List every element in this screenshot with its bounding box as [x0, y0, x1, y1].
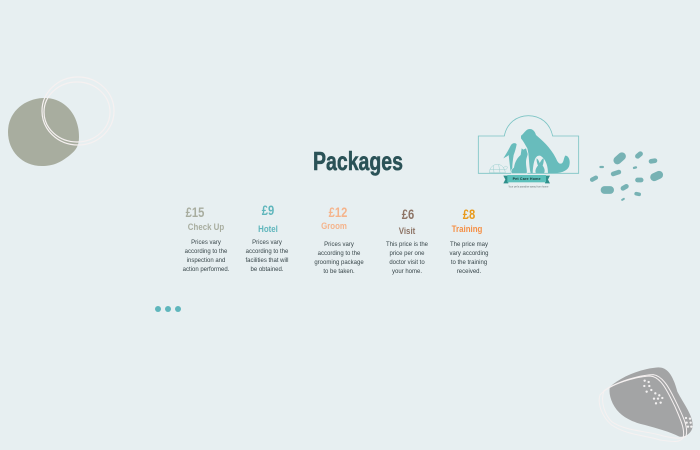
description — [182, 240, 229, 273]
logo tagline: Your pet's paradise away from home — [508, 186, 549, 189]
splatter: teal dashes — [589, 150, 664, 201]
blob: olive circle top left — [8, 98, 79, 166]
logo: pet care home — [478, 116, 579, 189]
cat silhouette — [511, 148, 528, 173]
parrot silhouette — [503, 143, 517, 173]
description — [386, 242, 428, 275]
rings: white outlines top left — [42, 77, 114, 145]
price: £12 — [329, 204, 347, 220]
price: £8 — [463, 206, 475, 222]
blob: grey pebble bottom right — [599, 367, 693, 442]
logo name: Pet Care Home — [513, 177, 541, 181]
description: Prices vary — [191, 240, 221, 246]
price: £9 — [262, 202, 274, 218]
description: according to the — [185, 249, 227, 255]
dog silhouette — [521, 129, 570, 173]
description: action performed. — [183, 267, 229, 273]
logo ribbon — [503, 176, 508, 183]
description: grooming package — [314, 260, 364, 266]
description: received. — [457, 269, 481, 275]
description — [314, 242, 364, 275]
description — [245, 240, 289, 273]
name: Groom — [321, 221, 347, 232]
description: according to the — [246, 249, 288, 255]
dots — [643, 379, 692, 428]
description: vary according — [449, 251, 489, 257]
description: according to the — [318, 251, 360, 257]
package: hotel — [245, 202, 289, 273]
description: to the training — [451, 260, 487, 266]
description: inspection and — [187, 258, 225, 264]
description: Prices vary — [324, 242, 354, 248]
description: to be taken. — [323, 269, 355, 275]
description: your home. — [392, 269, 422, 275]
description: doctor visit to — [389, 260, 425, 266]
description — [449, 242, 489, 275]
rabbit silhouette — [535, 158, 545, 173]
package: visit — [386, 206, 428, 275]
three dots — [155, 306, 181, 312]
name: Check Up — [187, 222, 224, 233]
name: Visit — [399, 226, 415, 237]
name: Hotel — [258, 224, 278, 235]
price: £6 — [402, 206, 414, 222]
package: training — [449, 206, 489, 275]
price: £15 — [186, 204, 204, 220]
logo frame — [478, 116, 579, 173]
name: Training — [451, 224, 482, 235]
description: Prices vary — [252, 240, 282, 246]
white outlines — [599, 375, 687, 442]
package: check up — [182, 204, 229, 273]
description: The price may — [450, 242, 488, 248]
description: price per one — [389, 251, 425, 257]
package: groom — [314, 204, 364, 275]
tortoise outline — [489, 164, 507, 173]
description: This price is the — [386, 242, 428, 248]
description: be obtained. — [250, 267, 284, 273]
title: Packages — [313, 146, 403, 176]
description: facilities that will — [245, 258, 289, 264]
